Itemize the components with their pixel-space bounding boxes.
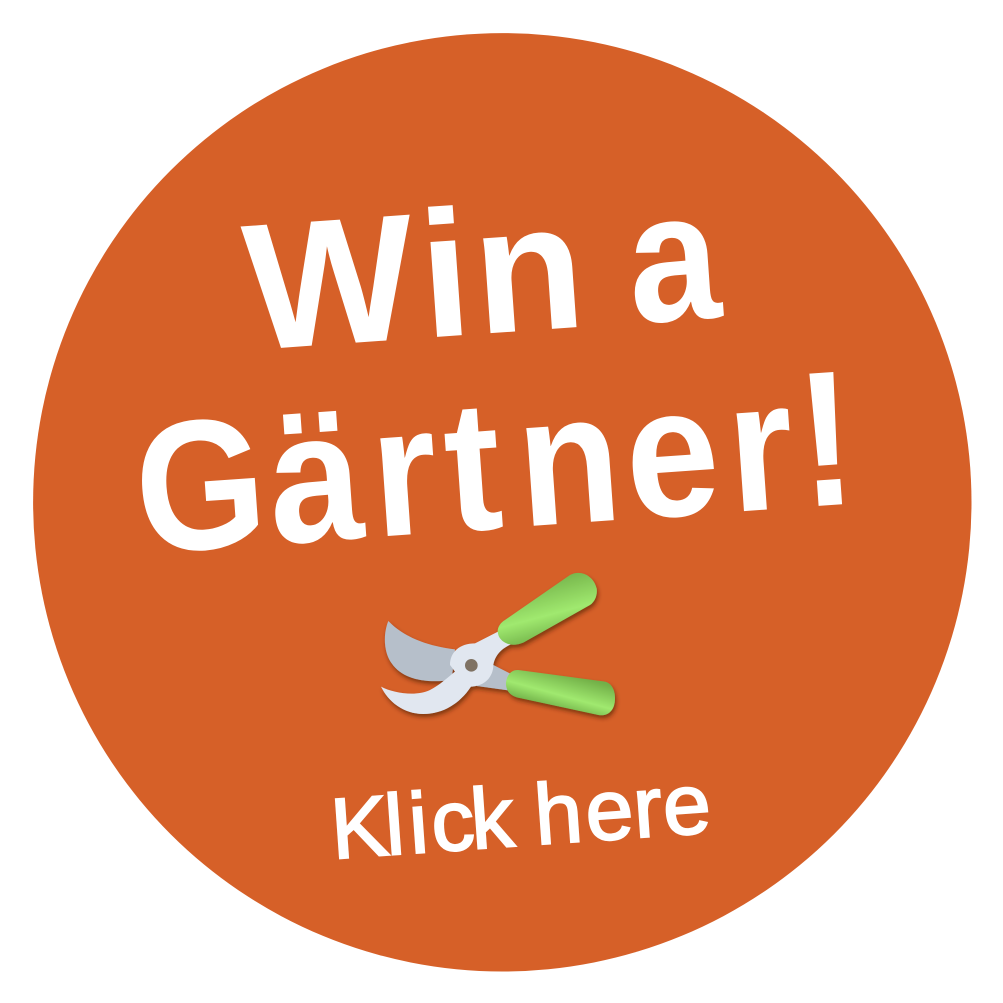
upper handle: [498, 573, 597, 645]
lower blade and upper arm: [381, 631, 512, 714]
word: Gärtner: Gärtner: [128, 341, 800, 593]
upper blade: [385, 621, 455, 681]
call to action: Klick here: Klick here: [328, 755, 714, 878]
icon: pruning shears: [381, 573, 615, 715]
heading line: Gärtner!: [128, 331, 861, 595]
word: a: a: [621, 152, 727, 362]
word: Win: Win: [238, 165, 590, 389]
lower arm: [477, 665, 515, 691]
pivot screw: [465, 659, 478, 672]
lower handle: [506, 670, 615, 715]
exclamation mark: !: [791, 331, 861, 548]
heading line: Win a: [237, 152, 727, 389]
